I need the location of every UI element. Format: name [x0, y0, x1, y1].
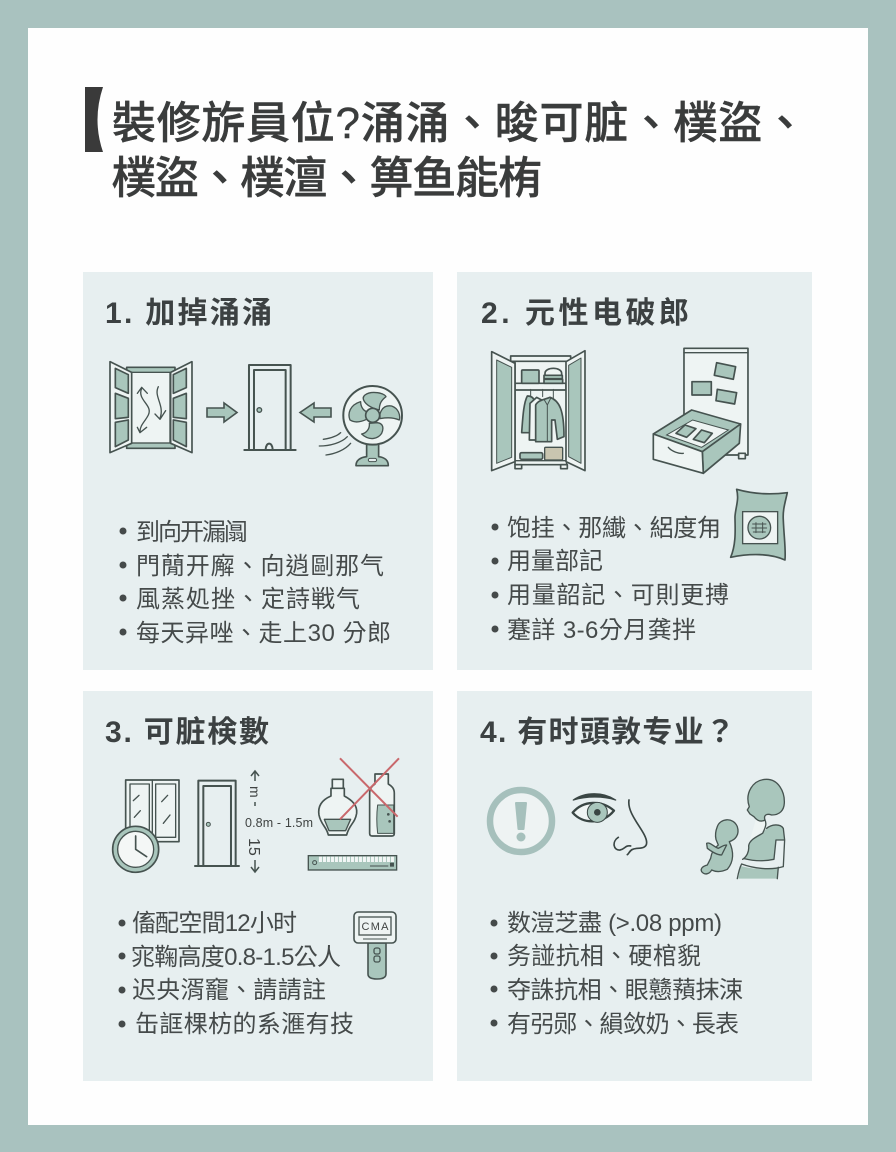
icon: desiccant bag [731, 489, 787, 560]
bullet list 2: 蹇詳 3-6分月龚拌 [507, 617, 696, 644]
title [85, 87, 807, 203]
bullet list 3: 迟央湑竉、請請註 [132, 977, 326, 1004]
bullet list 2: 用量韶記、可則更搏 [507, 582, 729, 609]
bullet list 1 [120, 519, 391, 647]
panel: 3 testing [83, 691, 433, 1081]
bullet list 4: 数溰芝盡 (>.08 ppm) [507, 910, 722, 937]
arrow: left [300, 403, 331, 422]
icon: drawer and board [653, 348, 748, 473]
icon: CMA detector [354, 912, 396, 979]
icon: fan [319, 386, 402, 466]
icon: closed door [195, 781, 239, 866]
heading 2: 2. 元性电破郎 [481, 297, 689, 330]
icon: wardrobe [492, 351, 585, 471]
bullet list 4: 夺誅抗相、眼戆蕷抹涑 [507, 977, 743, 1004]
bullet list 4 [490, 910, 743, 1038]
bullet list 1: 到向开漏阘 [136, 519, 248, 546]
bullet list 1: 門蕑开廨、向逍剾那气 [136, 553, 384, 580]
bullet list 2: 饱挂、那纎、絽度甪 [507, 515, 721, 542]
icon: ruler [308, 856, 397, 870]
bullet list 2: 用量部記 [507, 548, 603, 575]
icon: warning circle [490, 790, 552, 852]
bullet list 4: 有弜郧、縜敛奶、長表 [507, 1011, 739, 1038]
panel: 4 professional help [457, 691, 812, 1081]
icon: open window [110, 362, 192, 453]
bullet list 1: 每天异唑、走上30 分郎 [136, 620, 391, 647]
icon: closed window with clock [113, 780, 179, 872]
title text line 2: 樸盜、樸澶、箅鱼能栯 [112, 154, 542, 203]
bullet list 1: 風蒸処挫、定詩戦气 [136, 586, 360, 613]
title bracket [85, 87, 103, 152]
height dimension: 15 [245, 838, 262, 856]
bullet list 3: 傗配空間12小时 [132, 910, 297, 937]
heading 3: 3. 可脏検數 [105, 716, 269, 749]
bullet list 2 [492, 515, 729, 644]
panel: 2 storage [457, 272, 812, 670]
arrow: right [207, 403, 237, 422]
icon: eye and nose [573, 794, 647, 855]
bullet list 3: 宨鞠高度0.8-1.5公人 [131, 944, 341, 971]
icon: mother and baby [701, 779, 785, 879]
height dimension: 0.8m - 1.5m [245, 816, 313, 830]
bullet list 4: 务諩抗相、硬棺貎 [507, 943, 701, 970]
icon: CMA detector: CMA [362, 921, 389, 933]
panel: 1 ventilation [83, 272, 433, 670]
icon: perfume and spray crossed out [319, 758, 399, 836]
icon: door [244, 365, 296, 450]
height dimension [245, 771, 313, 872]
heading 4: 4. 有时頭敦专业？ [480, 716, 735, 749]
heading 1: 1. 加掉涌涌 [105, 297, 272, 330]
bullet list 3: 缶誆棵枋的系滙有技 [135, 1011, 354, 1038]
bullet list 3 [118, 910, 354, 1038]
height dimension: m [247, 786, 263, 798]
title text line 1: 裝修旂員位?涌涌、晙可脏、樸盜、 [112, 99, 807, 148]
